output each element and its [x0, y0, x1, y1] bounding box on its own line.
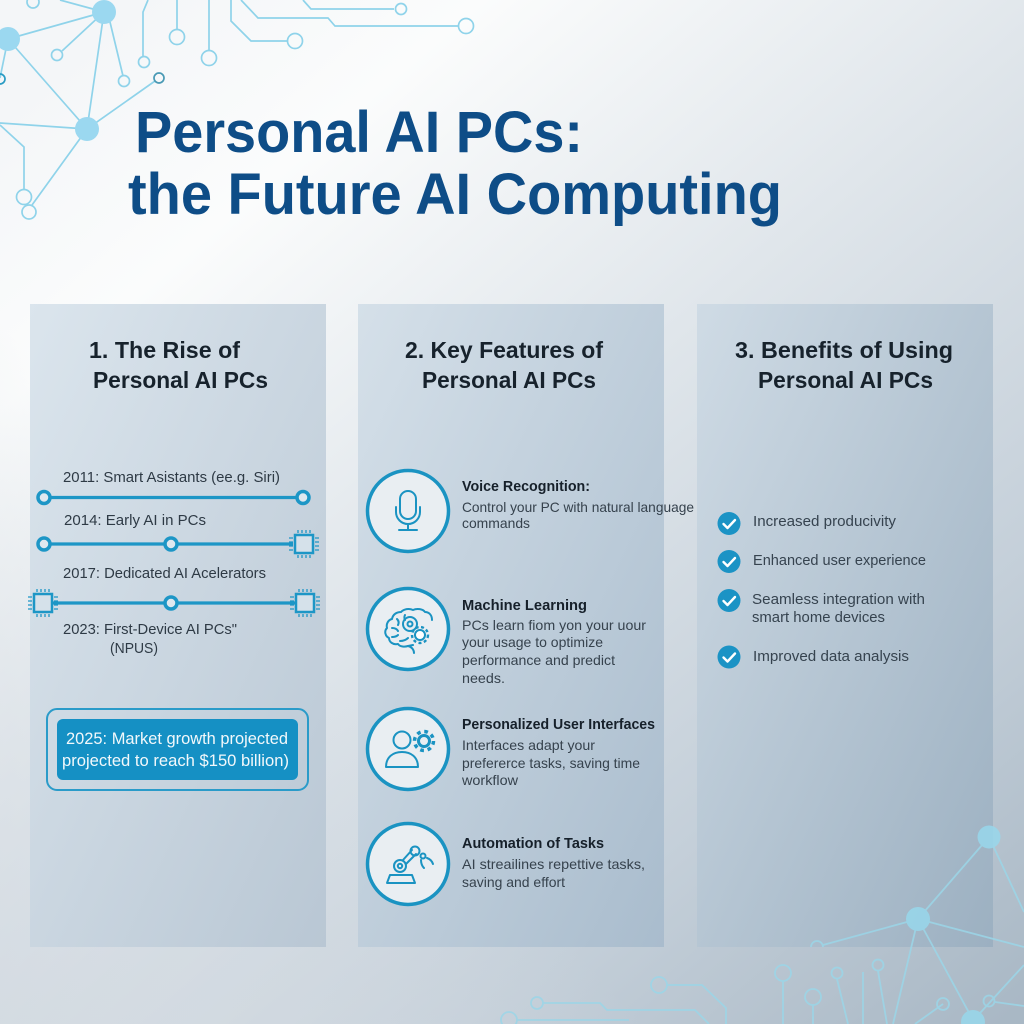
- timeline track 2014: [38, 530, 319, 558]
- benefit: increased productivity: Increased producivity: [753, 514, 897, 530]
- timeline track 2017: [28, 589, 320, 617]
- feature: machine learning: [462, 598, 646, 686]
- benefit: seamless integration: Seamless integration with: [752, 592, 925, 608]
- timeline track 2011: [38, 492, 309, 504]
- benefit: enhanced user experience: Enhanced user experience: [753, 553, 926, 569]
- icon: microphone: [368, 470, 448, 552]
- feature: personalized user interfaces: Interfaces adapt your: [462, 737, 595, 753]
- feature: voice recognition: [462, 479, 694, 531]
- feature: voice recognition: Control your PC with natural language: [462, 499, 694, 515]
- title: the Future AI Computing: [128, 162, 782, 227]
- feature: machine learning: needs.: [462, 670, 505, 686]
- icon: user with gear: [368, 708, 448, 790]
- icon: robot arm: [368, 824, 448, 904]
- benefit: improved data analysis: Improved data analysis: [753, 649, 909, 665]
- timeline label 2014: 2014: Early AI in PCs: [64, 513, 206, 529]
- feature: voice recognition: commands: [462, 515, 530, 531]
- callout: 2025 market growth: [47, 709, 308, 790]
- decoration: bottom-right network and circuit traces: [501, 826, 1024, 1024]
- callout: 2025 market growth: projected to reach $150 billion): [62, 752, 289, 770]
- callout: 2025 market growth: 2025: Market growth projected: [66, 730, 288, 748]
- benefit: increased productivity: [718, 512, 897, 535]
- panel: key features: [358, 304, 694, 947]
- timeline label 2023: (NPUS): [110, 641, 158, 657]
- icon: brain with gears: [368, 588, 448, 670]
- benefit: improved data analysis: [718, 646, 909, 668]
- feature: machine learning: PCs learn fiom yon your uour: [462, 617, 646, 633]
- feature: personalized user interfaces: Personalized User Interfaces: [462, 717, 655, 733]
- heading: the rise: 1. The Rise of: [89, 337, 240, 363]
- feature: voice recognition: Voice Recognition:: [462, 479, 590, 495]
- feature: machine learning: performance and predict: [462, 652, 615, 668]
- feature: automation of tasks: [462, 836, 645, 890]
- benefit: enhanced user experience: [718, 550, 926, 573]
- heading: benefits: 3. Benefits of Using: [735, 337, 953, 363]
- feature: machine learning: Machine Learning: [462, 598, 587, 614]
- title: Personal AI PCs:: [135, 100, 583, 165]
- heading: benefits: Personal AI PCs: [758, 367, 933, 393]
- heading: the rise: Personal AI PCs: [93, 367, 268, 393]
- heading: key features: 2. Key Features of: [405, 337, 603, 363]
- timeline label 2011: 2011: Smart Asistants (ee.g. Siri): [63, 470, 280, 486]
- feature: automation of tasks: AI streailines repettive tasks,: [462, 856, 645, 872]
- feature: machine learning: your usage to optimize: [462, 634, 603, 650]
- panel: benefits: [697, 304, 993, 947]
- benefit: seamless integration: [718, 589, 925, 626]
- timeline label 2023: [63, 622, 237, 657]
- heading: key features: [405, 337, 603, 393]
- feature: personalized user interfaces: [461, 717, 655, 788]
- feature: personalized user interfaces: workflow: [461, 772, 519, 788]
- timeline label 2023: 2023: First-Device AI PCs": [63, 622, 237, 638]
- panel: the rise of personal AI PCs: [28, 304, 326, 947]
- decoration: top-left network and circuit traces: [0, 0, 474, 219]
- title: [128, 100, 782, 227]
- feature: automation of tasks: Automation of Tasks: [462, 836, 604, 852]
- heading: key features: Personal AI PCs: [422, 367, 596, 393]
- timeline label 2017: 2017: Dedicated AI Acelerators: [63, 566, 266, 582]
- feature: personalized user interfaces: prefererce tasks, saving time: [462, 755, 640, 771]
- benefit: seamless integration: smart home devices: [752, 610, 885, 626]
- feature: automation of tasks: saving and effort: [462, 874, 565, 890]
- heading: the rise: [89, 337, 268, 393]
- heading: benefits: [735, 337, 953, 393]
